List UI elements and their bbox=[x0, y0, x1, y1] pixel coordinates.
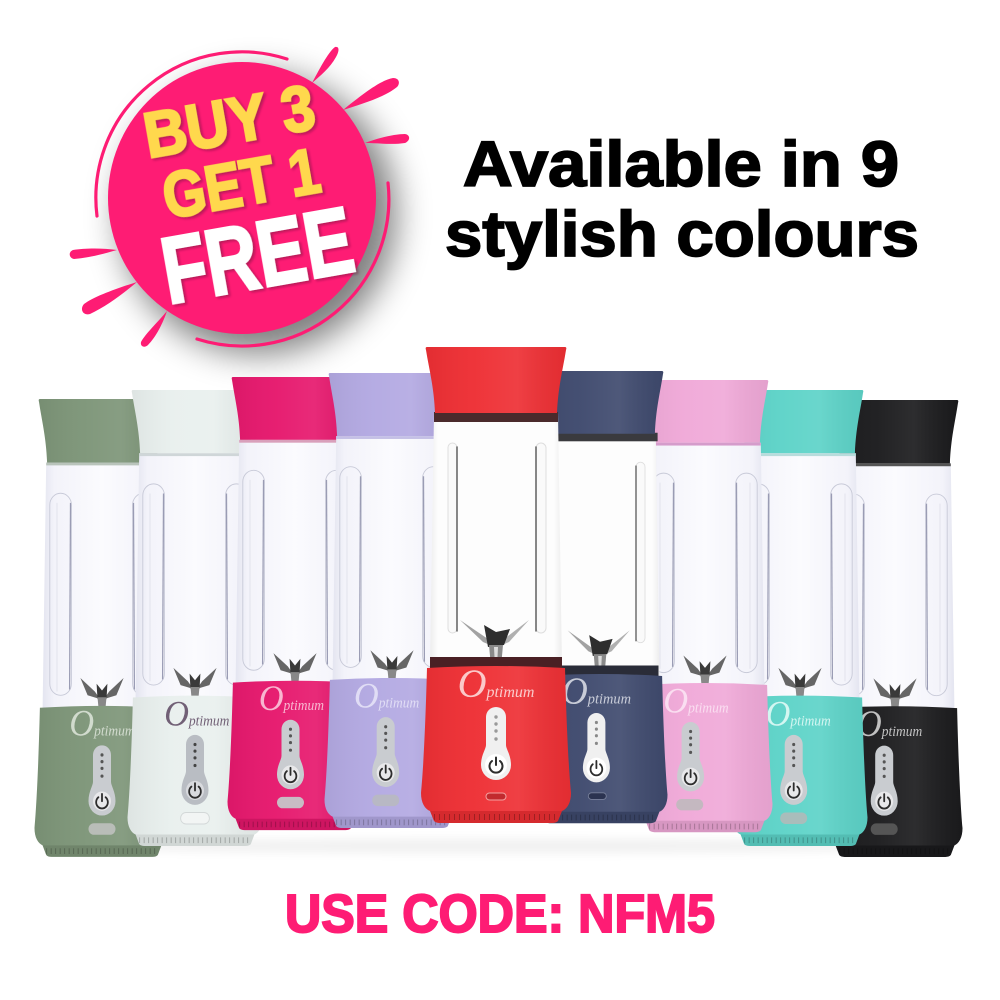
blender: aqua: Optimum bbox=[766, 693, 831, 734]
badge text: buy 3: BUY 3 bbox=[138, 71, 320, 172]
badge text: get 1: GET 1 bbox=[157, 134, 325, 233]
badge circle bbox=[108, 62, 376, 334]
blender: lavender bbox=[324, 373, 460, 828]
blender: lavender: Optimum bbox=[354, 676, 419, 716]
blender: black: Optimum bbox=[857, 703, 922, 744]
headline: Available in 9 bbox=[463, 128, 899, 200]
badge text: free: FREE bbox=[154, 187, 361, 323]
blender: navy: Optimum bbox=[562, 671, 631, 713]
blender: aqua bbox=[732, 390, 868, 846]
blender: red bbox=[421, 347, 571, 823]
blender: white: Optimum bbox=[164, 693, 229, 734]
headline: stylish colours bbox=[445, 198, 919, 270]
blender: navy bbox=[532, 371, 668, 823]
blender: black bbox=[828, 400, 962, 857]
blender: light pink bbox=[638, 380, 772, 832]
blender: sage green: Optimum bbox=[69, 703, 135, 744]
ground shadow bbox=[60, 839, 940, 853]
blender: white bbox=[128, 390, 262, 846]
blender: hot pink: Optimum bbox=[259, 678, 324, 718]
promo code: USE CODE: NFM5 bbox=[285, 884, 715, 944]
badge splash marks bbox=[70, 47, 409, 347]
badge swoosh arcs bbox=[96, 52, 389, 346]
blender: hot pink bbox=[228, 377, 362, 830]
promo badge: buy 3 get 1 free bbox=[70, 47, 409, 354]
blender: sage green bbox=[34, 399, 169, 857]
headline bbox=[445, 128, 919, 270]
badge shadow bbox=[120, 74, 396, 354]
blender: red: Optimum bbox=[458, 661, 534, 706]
blender: light pink: Optimum bbox=[663, 681, 729, 721]
